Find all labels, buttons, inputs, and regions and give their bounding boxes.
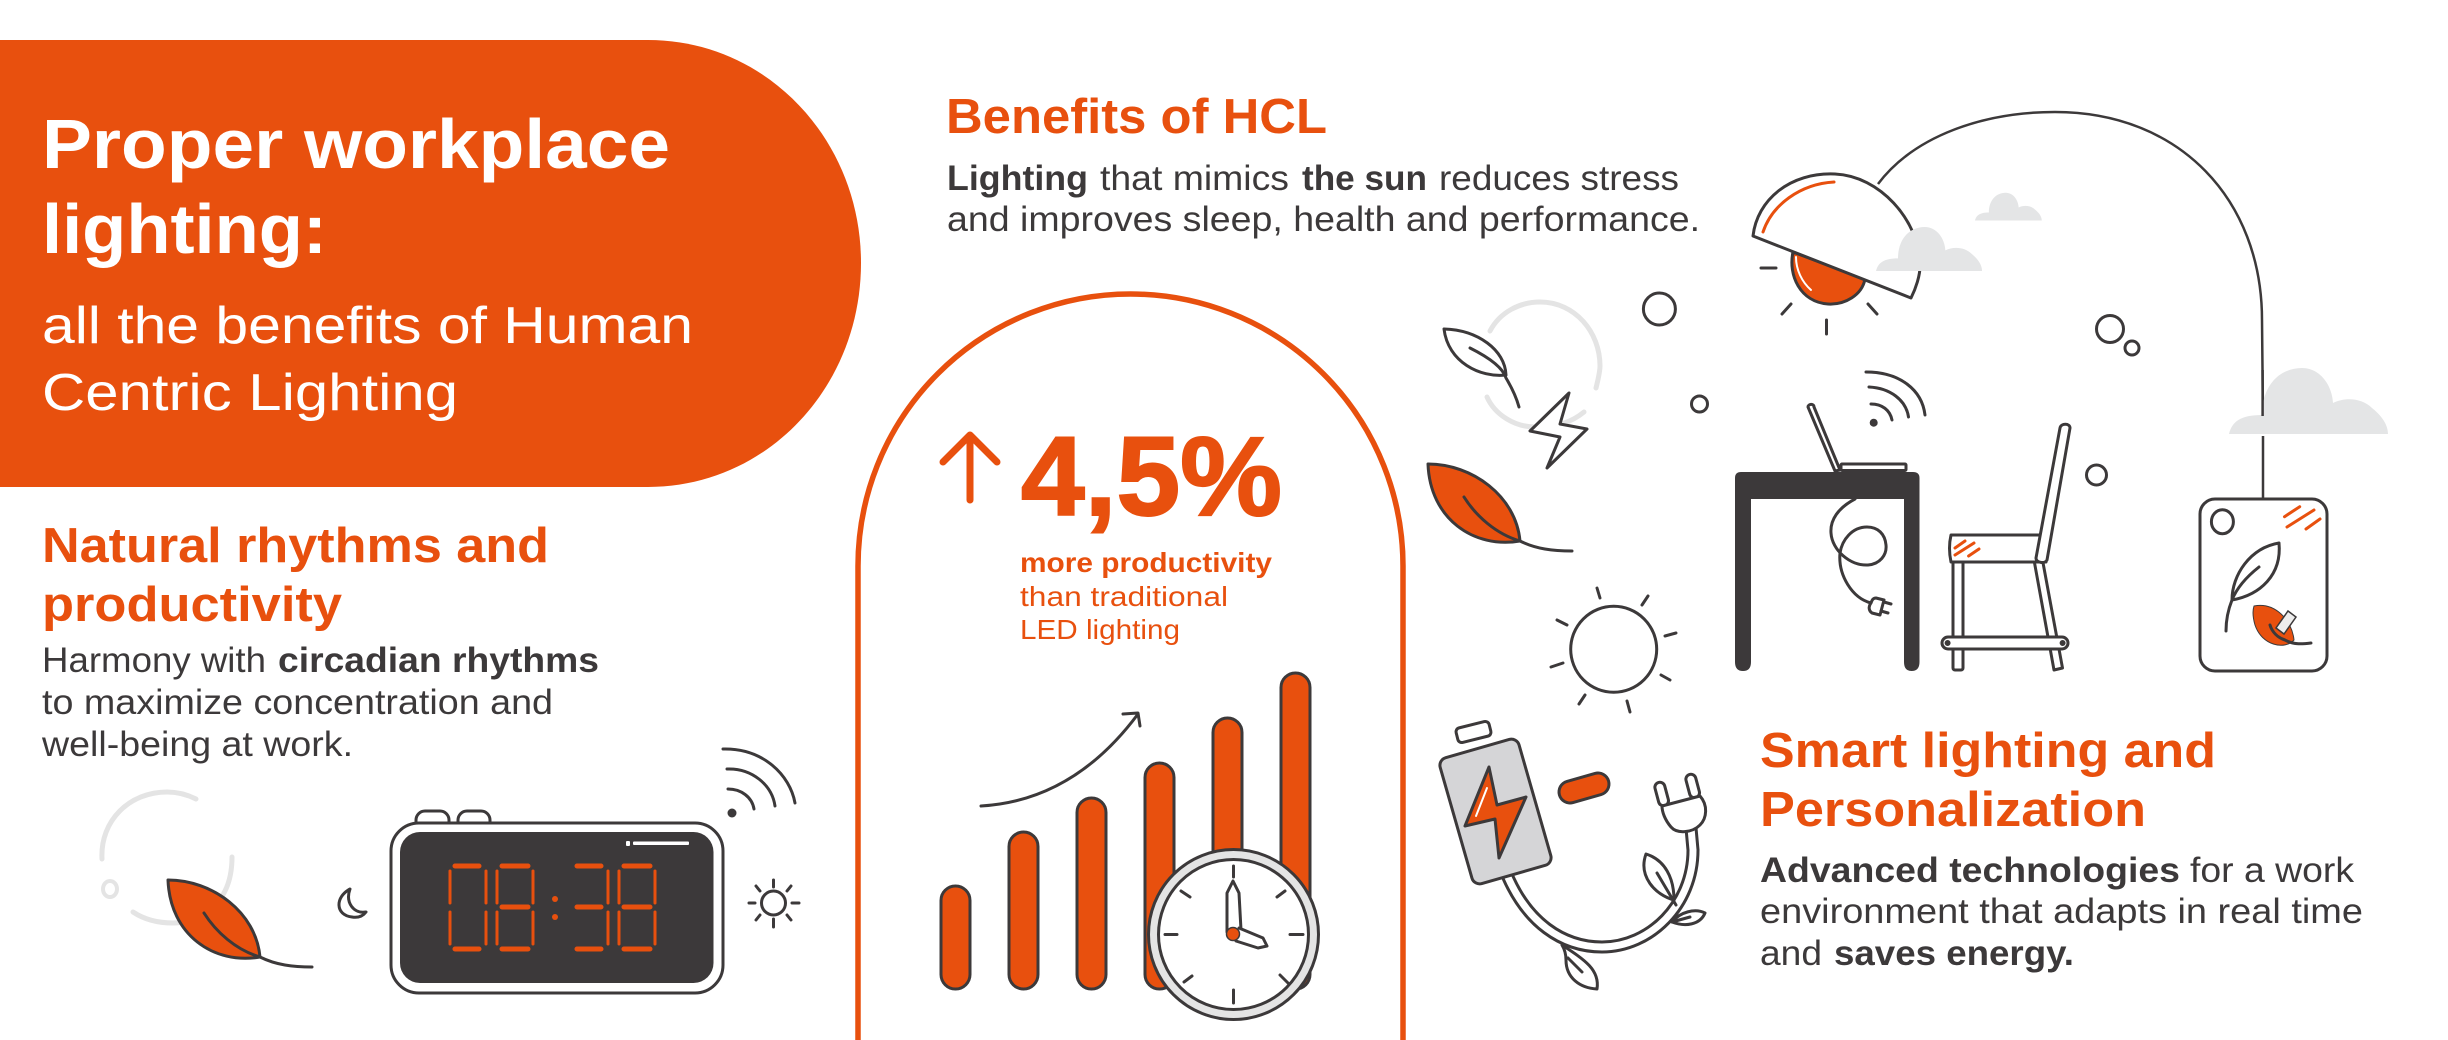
body: natural rhythms: well-being at work. xyxy=(41,725,353,764)
laptop cord xyxy=(1831,499,1886,603)
body: benefits of HCL: Lighting xyxy=(947,159,1088,198)
chair legs xyxy=(1953,560,2062,670)
clock hands xyxy=(1226,881,1267,948)
outline leaf xyxy=(2226,543,2279,631)
heading: natural rhythms: Natural rhythms and xyxy=(42,519,549,573)
plug xyxy=(1654,773,1706,832)
alarm clock xyxy=(391,811,723,993)
section: smart lighting xyxy=(1760,724,2363,973)
stat caption: more productivity xyxy=(1020,547,1272,578)
body: smart lighting: saves energy. xyxy=(1834,934,2074,973)
minus pill xyxy=(1570,784,1598,792)
clock buttons xyxy=(416,811,490,831)
cord plug xyxy=(1869,598,1891,615)
chair back xyxy=(2036,424,2070,562)
wall clock xyxy=(1148,850,1318,1020)
body: benefits of HCL: the sun xyxy=(1302,159,1427,198)
body: benefits of HCL: reduces stress xyxy=(1439,159,1679,198)
heading: benefits of HCL: Benefits of HCL xyxy=(946,90,1327,144)
lamp arm xyxy=(1878,112,2263,417)
chair xyxy=(1942,424,2070,670)
heading: smart lighting: Smart lighting and xyxy=(1760,724,2216,778)
crossbar xyxy=(1942,637,2068,649)
icon: wifi signal on laptop xyxy=(1866,372,1925,427)
laptop xyxy=(1808,404,1906,471)
icon: wifi signal on clock xyxy=(723,749,795,818)
title banner xyxy=(0,40,861,487)
body: benefits of HCL: and improves sleep, health and performance. xyxy=(947,200,1700,239)
icon: small sun xyxy=(749,880,799,927)
body: natural rhythms: to maximize concentration and xyxy=(42,683,553,722)
body: natural rhythms: Harmony with xyxy=(42,641,266,680)
section: natural rhythms text xyxy=(41,519,599,764)
body: smart lighting: environment that adapts in real time xyxy=(1760,892,2363,931)
subtitle: Centric Lighting xyxy=(42,364,458,422)
body: smart lighting xyxy=(1760,851,2363,973)
digital time 08:38 xyxy=(450,866,655,949)
lamp shade xyxy=(1753,174,1920,298)
icon: clouds xyxy=(1876,193,2388,499)
body: benefits of HCL: that mimics xyxy=(1100,159,1289,198)
body: natural rhythms xyxy=(41,641,599,764)
lamp bulb xyxy=(1761,252,1877,334)
stat caption xyxy=(1020,547,1272,645)
title: proper workplace lighting xyxy=(42,105,670,268)
icon: up arrow xyxy=(943,435,997,500)
subtitle: all the benefits of Human xyxy=(42,297,693,355)
body: smart lighting: and xyxy=(1760,934,1822,973)
desk xyxy=(1735,472,1920,671)
heading: smart lighting xyxy=(1760,724,2216,837)
panel: productivity arch xyxy=(858,294,1403,1040)
heading: smart lighting: Personalization xyxy=(1760,783,2146,837)
stat: 4,5%: 4,5% xyxy=(1021,414,1282,539)
section: benefits of HCL xyxy=(946,90,1700,239)
hanging lamp xyxy=(1753,112,2263,417)
body: natural rhythms: circadian rhythms xyxy=(278,641,599,680)
icon: leaf, ring and bolt xyxy=(1444,302,1600,468)
icon: moon xyxy=(339,889,366,917)
decorative bubbles xyxy=(1643,293,2139,485)
cord leaves xyxy=(1562,854,1705,989)
lamp base panel xyxy=(2200,499,2327,671)
battery cord xyxy=(1503,828,1693,947)
icon: orange leaf middle xyxy=(1428,464,1572,551)
stat caption: LED lighting xyxy=(1020,614,1180,645)
battery body xyxy=(1438,721,1553,886)
growth arrow xyxy=(981,713,1140,806)
bar chart xyxy=(941,673,1310,989)
illustration: orange leaf with grey ring xyxy=(102,792,312,967)
heading: natural rhythms: productivity xyxy=(42,578,342,632)
battery with plug xyxy=(1438,721,1706,989)
title: proper workplace lighting: Proper workplace xyxy=(42,105,670,183)
subtitle xyxy=(42,297,693,422)
body: smart lighting: Advanced technologies xyxy=(1760,851,2180,890)
heading: natural rhythms xyxy=(42,519,549,632)
body: smart lighting: for a work xyxy=(2190,851,2355,890)
chair seat xyxy=(1950,535,2046,562)
orange leaf with tag xyxy=(2253,605,2311,645)
stat caption: than traditional xyxy=(1020,581,1228,612)
body: benefits of HCL xyxy=(947,159,1700,239)
icon: outline sun xyxy=(1551,588,1676,712)
desk with laptop xyxy=(1735,404,1920,671)
title: proper workplace lighting: lighting: xyxy=(42,190,327,268)
hatch marks xyxy=(1955,541,1979,556)
